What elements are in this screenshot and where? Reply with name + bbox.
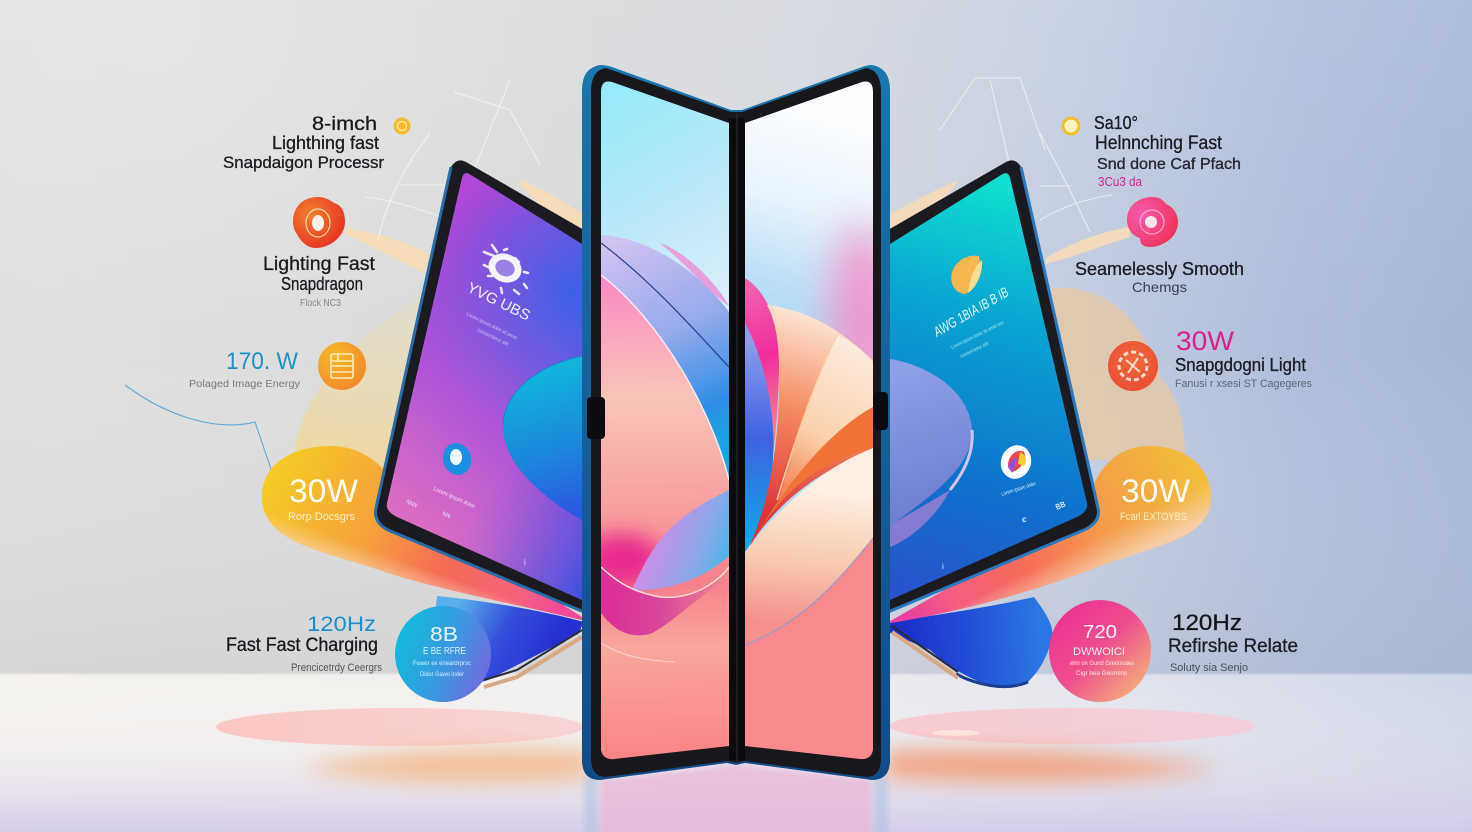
feature: 30W snapdragon light: 30W bbox=[1176, 326, 1235, 356]
badge: pink circle bbox=[1049, 600, 1151, 702]
feature: 8-inch processor: 8-imch bbox=[312, 114, 377, 135]
tan backdrop shape: left bbox=[295, 285, 445, 480]
feature: 120Hz fast charging bbox=[226, 613, 382, 674]
blue fold underside: left bbox=[430, 596, 584, 687]
blue fold underside: right bbox=[888, 597, 1052, 688]
icon: red swirl bbox=[293, 197, 345, 248]
badge: blue circle: 8B bbox=[430, 624, 458, 646]
left back phone bbox=[376, 160, 590, 612]
feature: seamlessly smooth: Seamelessly Smooth bbox=[1075, 259, 1244, 279]
colour blob: left bbox=[262, 446, 590, 622]
screen caption: Lorem ipsum dolor sit amet con bbox=[950, 320, 1005, 351]
tan backdrop shape: right bbox=[1050, 288, 1185, 460]
screen caption: consectetur elit bbox=[959, 341, 990, 360]
feature: 30W right text: Fcarl EXTOYBS bbox=[1120, 511, 1187, 523]
feature: seamlessly smooth: Chemgs bbox=[1132, 279, 1187, 295]
feature: 30W left text bbox=[288, 473, 359, 523]
badge: blue circle: E BE RFRE bbox=[423, 646, 466, 657]
phone frame bbox=[888, 160, 1098, 612]
floor glow: right bbox=[885, 749, 1220, 782]
floor bbox=[0, 674, 1472, 832]
phone reflection bbox=[584, 764, 888, 832]
screen title: YVG UBS bbox=[464, 279, 533, 324]
badge: pink circle: Cigr bea Geonsns bbox=[1076, 670, 1128, 677]
right back phone bbox=[882, 160, 1098, 612]
feature: sa10 top right: Helnnching Fast bbox=[1095, 133, 1223, 154]
floor disc: right bbox=[889, 708, 1255, 744]
bezel bbox=[591, 68, 881, 777]
feature: 120Hz fast charging: Fast Fast Charging bbox=[226, 635, 378, 656]
feature: 8-inch processor bbox=[223, 114, 384, 172]
feature: 30W left text: Rorp Docsgrs bbox=[288, 511, 355, 523]
screen small labels: i bbox=[524, 558, 526, 567]
feature: 120Hz fast charging: Prencicetrdy Ceergrs bbox=[291, 662, 382, 674]
feature: lighting fast snapdragon: Lighting Fast bbox=[263, 254, 376, 275]
screen bbox=[890, 173, 1088, 600]
screen caption bbox=[950, 320, 1005, 360]
app icon: colour wheel bbox=[996, 441, 1036, 483]
feature: 170 W energy bbox=[189, 348, 301, 390]
centre spine bbox=[729, 113, 745, 763]
feature: 30W right text: 30W bbox=[1121, 473, 1191, 509]
egg icon bbox=[951, 256, 982, 294]
screen caption: consectetur elit bbox=[476, 327, 510, 348]
floor disc: left bbox=[216, 708, 584, 746]
feature: 30W snapdragon light: Snapgdogni Light bbox=[1175, 355, 1306, 375]
feature: 30W snapdragon light: Fanusi r xsesi ST Cagegeres bbox=[1175, 378, 1312, 390]
feature: sa10 top right: Snd done Caf Pfach bbox=[1097, 156, 1241, 173]
phone frame bbox=[376, 160, 584, 612]
left screen bbox=[601, 82, 729, 760]
feature: 30W right text bbox=[1120, 473, 1191, 523]
feature: 8-inch processor: Lighthing fast bbox=[272, 133, 379, 153]
screen caption: Lorem ipsum dolor sit amet bbox=[465, 311, 519, 342]
badge: pink circle: 720 bbox=[1083, 622, 1117, 642]
badge: pink circle: ehn on Gund Greonnaes bbox=[1070, 660, 1135, 667]
feature: sa10 top right: Sa10° bbox=[1094, 113, 1138, 133]
app icon: blue dot bbox=[439, 440, 475, 478]
feature: 120Hz refresh rate: Soluty sia Senjo bbox=[1170, 662, 1248, 674]
screen small labels bbox=[405, 486, 526, 567]
screen small labels: i bbox=[942, 562, 944, 571]
icon: yellow ring right bbox=[1063, 118, 1079, 134]
thin guide lines: right bbox=[940, 78, 1112, 232]
feature: 120Hz refresh rate bbox=[1168, 610, 1298, 674]
icon: red circle glyph bbox=[1108, 341, 1158, 391]
feature: lighting fast snapdragon: Flock NC3 bbox=[300, 298, 341, 309]
decorative ribbons: right bbox=[888, 180, 1130, 264]
blue connector curve bbox=[125, 385, 272, 472]
feature: sa10 top right bbox=[1094, 113, 1241, 189]
feature: 120Hz refresh rate: Refirshe Relate bbox=[1168, 636, 1298, 657]
feature: 120Hz fast charging: 120Hz bbox=[307, 613, 376, 636]
badge: blue circle: Fewer ex eneardrprsc bbox=[413, 660, 472, 667]
right screen bbox=[745, 82, 873, 760]
feature: 170 W energy: Polaged Image Energy bbox=[189, 378, 301, 390]
floor glow: left bbox=[300, 749, 590, 782]
badge: blue circle bbox=[395, 606, 491, 702]
colour blob: right bbox=[885, 446, 1211, 624]
screen small labels: c bbox=[1022, 515, 1027, 524]
phone frame bbox=[582, 65, 890, 780]
screen bbox=[386, 173, 582, 600]
feature: 30W snapdragon light bbox=[1175, 326, 1312, 390]
icon: orange document bbox=[318, 342, 366, 390]
feature: sa10 top right: 3Cu3 da bbox=[1098, 174, 1143, 189]
feature: 120Hz refresh rate: 120Hz bbox=[1172, 610, 1242, 635]
feature: 30W left text: 30W bbox=[289, 473, 359, 509]
screen title: AWG 1BIA IB B IB bbox=[930, 284, 1011, 340]
icon: pink swirl bbox=[1127, 197, 1178, 247]
feature: seamlessly smooth bbox=[1075, 259, 1244, 295]
feature: lighting fast snapdragon bbox=[263, 254, 376, 309]
feature: lighting fast snapdragon: Snapdragon bbox=[281, 274, 363, 294]
feature: 8-inch processor: Snapdaigon Processr bbox=[223, 153, 384, 172]
screen small labels: BB bbox=[1054, 499, 1067, 512]
screen small labels bbox=[942, 481, 1067, 571]
screen small labels: Lorem ipsum dolor bbox=[432, 486, 476, 510]
badge: blue circle: Didor Gawo inder bbox=[420, 671, 465, 678]
thin guide lines: left bbox=[365, 80, 540, 240]
feature: 170 W energy: 170. W bbox=[226, 348, 298, 375]
screen small labels: Lorem ipsum dolor bbox=[1001, 481, 1037, 498]
hinge details bbox=[587, 392, 888, 439]
icon: yellow lock badge bbox=[394, 118, 410, 134]
decorative ribbons: left bbox=[345, 180, 585, 272]
screen small labels: NNN bbox=[405, 499, 418, 509]
sun icon bbox=[484, 245, 528, 294]
badge: pink circle: DWWOICI bbox=[1073, 646, 1125, 658]
centre foldable phone bbox=[582, 65, 894, 780]
screen small labels: NN bbox=[441, 511, 451, 520]
